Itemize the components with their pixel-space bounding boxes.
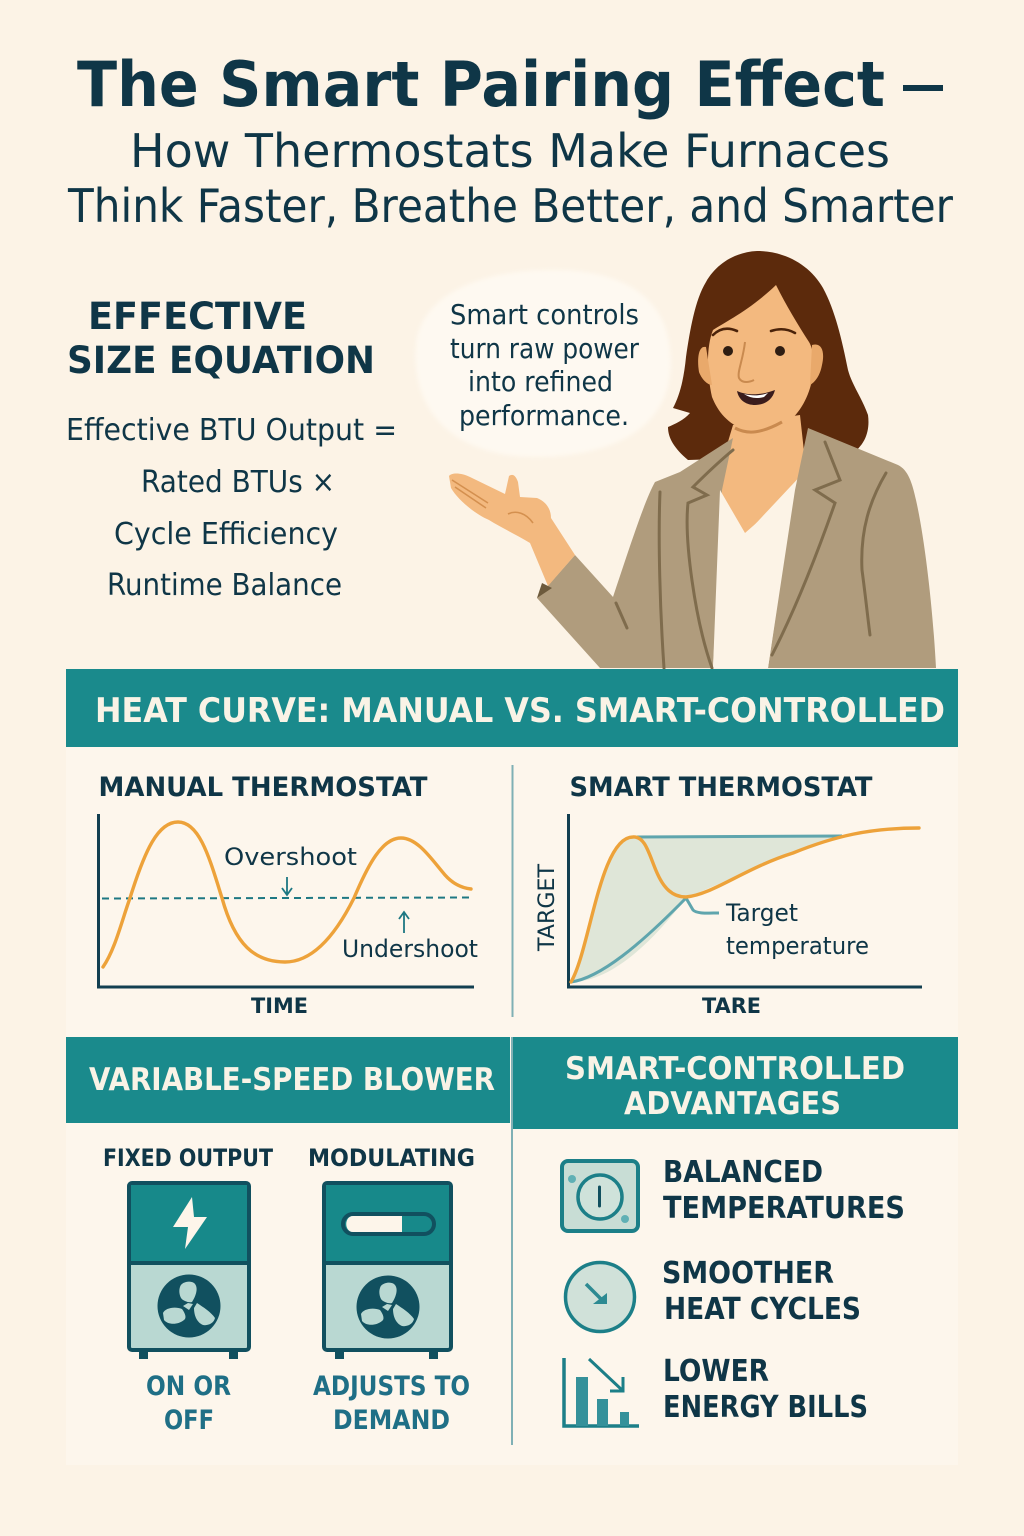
adjusts to demand label: DEMAND: [333, 1405, 450, 1436]
manual axes: [98, 814, 474, 987]
smoother heat cycles text: [662, 1256, 861, 1327]
lower energy bills text: [663, 1354, 868, 1425]
speech bubble: [416, 270, 671, 457]
target temperature label: [725, 899, 869, 960]
panel: smart-controlled advantages: [513, 1037, 958, 1426]
on or off label: OFF: [164, 1405, 214, 1436]
chart: smart thermostat: [535, 772, 922, 1018]
modulating label: MODULATING: [308, 1144, 475, 1172]
balanced temperatures text: BALANCED: [663, 1155, 823, 1190]
neck: [715, 415, 806, 535]
eyes and brows: [713, 329, 795, 356]
x axis label: tare: TARE: [702, 994, 761, 1018]
title: The Smart Pairing Effect: [77, 48, 885, 121]
section band: heat curve: [66, 669, 958, 747]
illustration: presenter woman: [449, 251, 936, 668]
heading: smart thermostat: SMART THERMOSTAT: [570, 772, 873, 803]
heading: effective size equation: [67, 295, 375, 382]
target curve teal: [571, 836, 842, 982]
band: smart-controlled advantages: SMART-CONTROLLED: [565, 1051, 905, 1087]
heading: effective size equation: SIZE EQUATION: [67, 339, 375, 382]
icon: modulating furnace: [324, 1183, 451, 1359]
x axis label: time: TIME: [251, 994, 308, 1018]
jacket: [537, 428, 936, 668]
speech bubble: into refined: [468, 365, 613, 398]
smart heat curve: [571, 828, 919, 982]
target temperature label: Target: [725, 899, 798, 927]
smart axes: [568, 814, 922, 987]
shirt: [713, 490, 794, 668]
equation text: [66, 413, 397, 603]
equation text: Cycle Efficiency: [114, 517, 338, 552]
speech bubble: performance.: [459, 399, 629, 432]
section band: heat curve: HEAT CURVE: MANUAL VS. SMART-CONTROLLED: [95, 691, 945, 731]
undershoot label and arrow: [342, 912, 478, 963]
mouth: [737, 390, 775, 405]
speech bubble: Smart controls: [450, 298, 639, 331]
speech bubble: turn raw power: [450, 332, 639, 365]
adjusts to demand label: [313, 1371, 470, 1436]
y axis label: target: TARGET: [535, 863, 560, 952]
band: smart-controlled advantages: [513, 1037, 958, 1129]
heading: manual thermostat: MANUAL THERMOSTAT: [98, 772, 428, 803]
title: [67, 48, 953, 233]
heading: effective size equation: EFFECTIVE: [88, 295, 307, 338]
overshoot label and arrow: [224, 843, 357, 895]
band: variable-speed blower: VARIABLE-SPEED BLOWER: [89, 1062, 495, 1098]
jacket lapels: [616, 442, 886, 668]
chart: manual thermostat: [98, 772, 478, 1018]
icon: balanced temperature dial: [562, 1161, 638, 1231]
target temperature label: temperature: [726, 932, 869, 960]
band: smart-controlled advantages: ADVANTAGES: [624, 1086, 841, 1122]
icon: falling bar chart: [564, 1358, 639, 1426]
arm and hand: [449, 473, 575, 586]
panel: effective size equation: [66, 295, 397, 603]
equation text: Runtime Balance: [107, 568, 342, 603]
lower energy bills text: ENERGY BILLS: [663, 1390, 868, 1425]
equation text: Effective BTU Output =: [66, 413, 397, 448]
nose: [739, 342, 754, 382]
smoother heat cycles text: HEAT CYCLES: [664, 1292, 861, 1327]
smoother heat cycles text: SMOOTHER: [662, 1256, 834, 1291]
icon: smoother cycle gauge: [566, 1262, 634, 1332]
face: [708, 285, 814, 433]
cuff: [537, 583, 552, 598]
balanced temperatures text: [663, 1155, 905, 1226]
adjusts to demand label: ADJUSTS TO: [313, 1371, 470, 1402]
undershoot label and arrow: Undershoot: [342, 935, 478, 963]
panel: variable-speed blower: [66, 1037, 510, 1436]
title: Think Faster, Breathe Better, and Smarter: [67, 179, 953, 233]
on or off label: [146, 1371, 231, 1436]
band: variable-speed blower: [66, 1037, 510, 1123]
manual heat curve: [103, 822, 471, 967]
target dashed line: [102, 898, 470, 899]
ears: [698, 347, 712, 385]
smart shaded area: [571, 836, 842, 982]
equation text: Rated BTUs ×: [141, 465, 335, 500]
hair: [668, 251, 868, 460]
title: How Thermostats Make Furnaces: [130, 124, 890, 178]
fixed output label: FIXED OUTPUT: [103, 1144, 274, 1172]
icon: fixed output furnace: [129, 1183, 249, 1359]
chin shadow: [735, 422, 782, 432]
overshoot label and arrow: Overshoot: [224, 843, 357, 871]
on or off label: ON OR: [146, 1371, 231, 1402]
lower energy bills text: LOWER: [663, 1354, 769, 1389]
balanced temperatures text: TEMPERATURES: [663, 1191, 905, 1226]
